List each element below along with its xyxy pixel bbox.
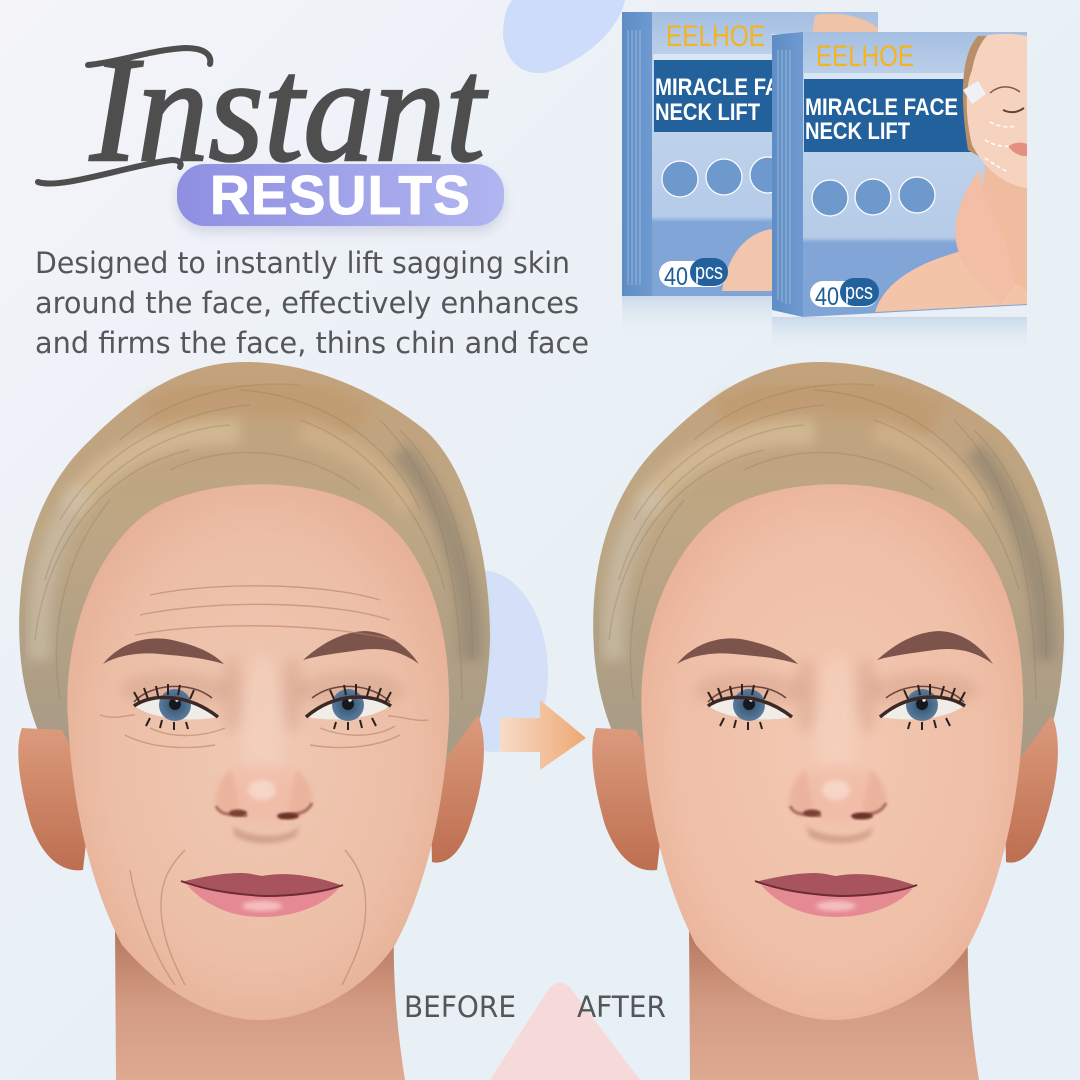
product: front box: EELHOE <box>816 40 914 73</box>
results pill: RESULTS <box>210 164 471 226</box>
product: front box: MIRACLE FACE <box>805 94 958 121</box>
product model <box>875 34 1027 312</box>
description text: Designed to instantly lift sagging skin <box>35 246 570 280</box>
label: before: BEFORE <box>404 990 516 1024</box>
product: front box: 40 <box>815 283 839 311</box>
face: after <box>592 362 1064 1080</box>
label: after: AFTER <box>577 990 666 1024</box>
product: back box: pcs <box>695 259 723 284</box>
face: before <box>18 362 490 1080</box>
product: back box: MIRACLE FACE <box>655 74 808 101</box>
product: back box: NECK LIFT <box>655 99 760 126</box>
product: front box: pcs <box>845 279 873 304</box>
description text: around the face, effectively enhances <box>35 286 579 320</box>
arrow <box>500 700 586 770</box>
description text: and firms the face, thins chin and face <box>35 326 589 360</box>
heading: Instant script: Instant <box>89 27 488 193</box>
product: back box: EELHOE <box>666 20 765 53</box>
product: back box <box>622 12 878 334</box>
product: front box <box>772 32 1027 353</box>
product: front box: NECK LIFT <box>805 118 910 145</box>
description text <box>35 246 589 360</box>
product: back box: 40 <box>664 263 688 291</box>
